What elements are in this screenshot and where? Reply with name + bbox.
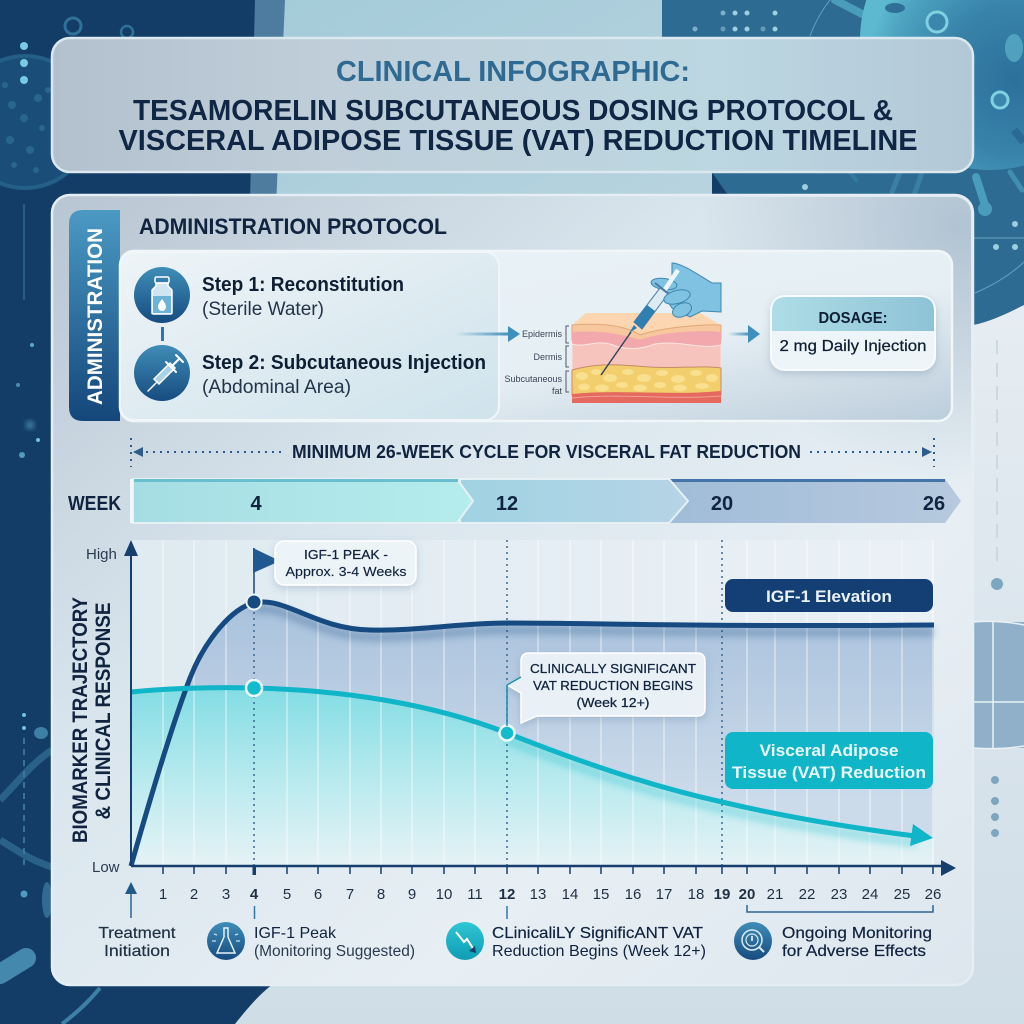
y axis title <box>69 597 115 843</box>
brackets <box>566 326 569 392</box>
note: VAT reduction begins: CLinicaliLY SignificANT VAT <box>492 925 703 942</box>
panel: main <box>52 195 973 985</box>
week tick numbers: 20 <box>739 886 755 903</box>
week tick numbers: 24 <box>862 886 878 903</box>
note: IGF-1 peak: (Monitoring Suggested) <box>254 943 415 960</box>
note: IGF-1 peak: IGF-1 Peak <box>254 925 337 942</box>
tick marks to notes <box>254 906 507 919</box>
segment: weeks 12 to 20 <box>660 479 961 523</box>
icon: syringe <box>134 345 190 401</box>
week numbers <box>250 493 945 515</box>
week tick numbers: 5 <box>283 886 291 903</box>
callout: clinically significant VAT reduction: VAT REDUCTION BEGINS <box>533 678 693 693</box>
curve: VAT reduction <box>131 688 915 836</box>
axis labels high and low: Low <box>92 859 120 876</box>
marker: VAT at week 4 <box>246 680 262 696</box>
skin layer labels: fat <box>552 386 562 396</box>
step 1 text <box>202 274 404 320</box>
arrow: steps to illustration <box>455 326 520 342</box>
callout: clinically significant VAT reduction: CLINICALLY SIGNIFICANT <box>530 661 696 676</box>
callout: dosage: 2 mg Daily Injection <box>780 338 926 355</box>
week tick numbers: 8 <box>377 886 385 903</box>
week tick numbers: 1 <box>159 886 167 903</box>
week tick numbers: 18 <box>688 886 704 903</box>
step 2 text: (Abdominal Area) <box>202 377 351 398</box>
icon: vial <box>134 267 190 323</box>
timeline notes <box>98 882 933 960</box>
week tick numbers: 21 <box>767 886 783 903</box>
week tick numbers: 11 <box>467 886 483 903</box>
note: ongoing monitoring: for Adverse Effects <box>782 943 926 960</box>
chart background <box>131 540 934 866</box>
dotted week markers <box>254 540 722 866</box>
week tick numbers: 4 <box>250 886 259 903</box>
axis labels high and low: High <box>86 546 117 563</box>
grid lines <box>163 540 933 866</box>
callout: clinically significant VAT reduction <box>507 653 705 726</box>
background lens and dots right <box>973 340 1024 837</box>
marker: IGF-1 peak flag <box>246 548 280 610</box>
illustration: skin layers and injection <box>504 263 721 403</box>
week numbers: 4 <box>250 493 262 515</box>
skin layer labels: Subcutaneous <box>504 374 562 384</box>
step 1 text: Step 1: Reconstitution <box>202 274 404 296</box>
x axis <box>131 860 956 876</box>
y axis title: BIOMARKER TRAJECTORY <box>69 597 92 843</box>
legend: IGF-1 elevation <box>725 579 933 612</box>
callout: clinically significant VAT reduction: (Week 12+) <box>576 695 650 710</box>
curve: IGF-1 elevation <box>131 602 934 866</box>
step 2 text <box>202 352 486 398</box>
week tick numbers: 19 <box>714 886 730 903</box>
background cell illustration <box>0 18 133 300</box>
panel: title <box>52 38 973 172</box>
skin layer labels: Dermis <box>534 352 562 362</box>
week tick numbers: 22 <box>799 886 815 903</box>
callout: dosage <box>771 296 935 370</box>
week tick numbers: 25 <box>894 886 910 903</box>
note: IGF-1 peak <box>254 925 415 960</box>
title line 3: VISCERAL ADIPOSE TISSUE (VAT) REDUCTION TIMELINE <box>118 125 918 157</box>
y axis <box>124 540 138 866</box>
background dots top right <box>692 10 1018 250</box>
marker: VAT at week 12 <box>500 726 514 740</box>
week tick numbers: 12 <box>499 886 515 903</box>
segment: weeks 0 to 4 <box>133 479 473 523</box>
panel: administration tab <box>69 210 120 421</box>
step 1 text: (Sterile Water) <box>202 299 324 320</box>
arrowhead: VAT <box>910 824 933 846</box>
title line 2: TESAMORELIN SUBCUTANEOUS DOSING PROTOCOL & <box>133 95 893 127</box>
heading: administration protocol: ADMINISTRATION PROTOCOL <box>139 214 447 239</box>
week tick numbers: 23 <box>831 886 847 903</box>
chart: biomarker trajectory <box>69 540 956 903</box>
note: ongoing monitoring <box>782 925 932 960</box>
step 2 text: Step 2: Subcutaneous Injection <box>202 352 486 374</box>
skin layer labels: Epidermis <box>522 329 562 339</box>
week tick numbers: 26 <box>925 886 941 903</box>
title line 1: CLINICAL INFOGRAPHIC: <box>336 56 690 88</box>
note: VAT reduction begins <box>492 925 706 960</box>
week numbers: 12 <box>496 493 518 515</box>
background glowing dots and bacteria left <box>0 343 100 1024</box>
gloved fingers <box>662 287 694 320</box>
area: VAT <box>131 688 934 866</box>
icon: flask <box>207 922 245 960</box>
week numbers: 26 <box>923 493 945 515</box>
connector <box>161 327 164 341</box>
week numbers: 20 <box>711 493 733 515</box>
week tick numbers: 15 <box>593 886 609 903</box>
panel: administration tab: ADMINISTRATION <box>84 228 107 405</box>
curve shadows <box>254 609 934 843</box>
cycle span: minimum 26-week <box>131 438 934 467</box>
note: ongoing monitoring: Ongoing Monitoring <box>782 925 932 942</box>
panel: right illustration card <box>120 251 952 421</box>
week tick numbers: 14 <box>562 886 578 903</box>
legend: IGF-1 elevation: IGF-1 Elevation <box>766 587 892 606</box>
legend: VAT reduction: Visceral Adipose <box>760 741 898 760</box>
icon: declining arrow <box>446 922 484 960</box>
treatment initiation: Initiation <box>104 943 170 960</box>
segment: weeks 4 to 12 <box>460 479 688 523</box>
treatment initiation: Treatment <box>98 925 176 942</box>
week tick numbers: 10 <box>436 886 452 903</box>
gloved hand back <box>650 263 721 317</box>
y axis title: & CLINICAL RESPONSE <box>92 602 115 820</box>
week tick numbers: 13 <box>530 886 546 903</box>
axis labels high and low <box>86 546 120 876</box>
callout: IGF-1 peak: Approx. 3-4 Weeks <box>286 564 407 579</box>
week label: WEEK <box>68 493 121 515</box>
week bar <box>68 479 961 523</box>
virus illustration <box>835 0 1024 216</box>
callout: dosage: DOSAGE: <box>818 310 888 327</box>
week tick numbers: 17 <box>656 886 672 903</box>
treatment initiation <box>98 882 176 960</box>
cycle span: minimum 26-week: MINIMUM 26-WEEK CYCLE FOR VISCERAL FAT REDUCTION <box>292 442 801 462</box>
icon: monitoring <box>734 922 772 960</box>
week tick numbers: 2 <box>190 886 198 903</box>
legend: VAT reduction: Tissue (VAT) Reduction <box>732 763 926 782</box>
callout: IGF-1 peak <box>275 541 416 585</box>
area: IGF-1 <box>131 602 934 866</box>
callout: IGF-1 peak: IGF-1 PEAK - <box>304 547 388 562</box>
syringe <box>601 270 678 375</box>
week tick numbers: 3 <box>222 886 230 903</box>
arrow: illustration to dosage <box>728 325 760 343</box>
week tick numbers <box>159 886 941 903</box>
week tick numbers: 9 <box>408 886 416 903</box>
skin layers <box>572 313 721 403</box>
week tick numbers: 6 <box>314 886 322 903</box>
week tick numbers: 16 <box>625 886 641 903</box>
week tick numbers: 7 <box>346 886 354 903</box>
legend: VAT reduction <box>725 732 933 789</box>
note: VAT reduction begins: Reduction Begins (Week 12+) <box>492 943 706 960</box>
skin layer labels <box>504 329 562 396</box>
bracket: weeks 20 to 26 <box>747 905 933 912</box>
panel: steps <box>120 252 499 420</box>
